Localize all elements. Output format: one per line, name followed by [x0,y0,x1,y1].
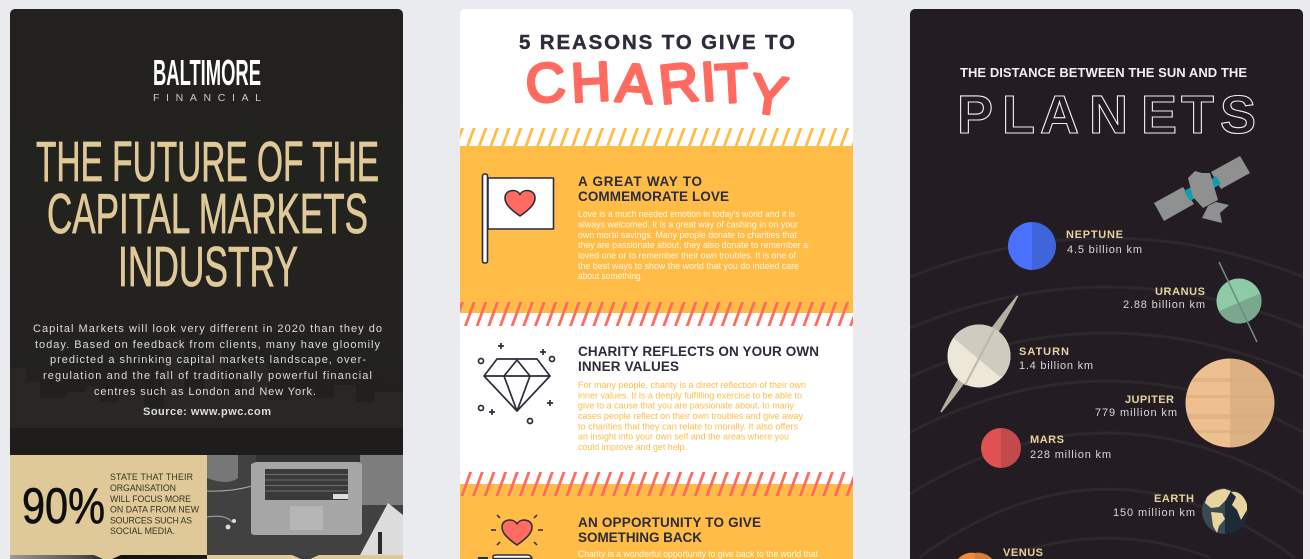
reason 2 text: could improve and get help. [578,442,687,452]
icon: heart over open hand [478,515,543,559]
reason 1 text [578,174,809,281]
reason 1 text: Love is a much needed emotion in today's world and it is [578,209,795,219]
reason 2 text [578,344,819,452]
label: Mars: 228 million km [1030,449,1111,461]
label: Neptune: 4.5 billion km [1067,244,1142,256]
label: Neptune: NEPTUNE [1066,229,1123,241]
label: Mars: MARS [1030,434,1064,446]
label: Jupiter: 779 million km [1095,407,1177,419]
reason 1 text: own moral savings. Many people donate to charities that [578,230,797,240]
title: INDUSTRY [118,235,298,299]
charity title: CHARITY [524,50,791,128]
planet: Neptune [1008,222,1056,270]
reason 1 text: the best ways to show the world that you do indeed care [578,261,799,271]
reason 2 text: CHARITY REFLECTS ON YOUR OWN [578,344,819,359]
intro text: Capital Markets will look very different in 2020 than they do [33,323,382,335]
icon: satellite [1154,156,1250,223]
label: Neptune [1066,230,1142,253]
icon: flag with heart [482,174,554,263]
title: CAPITAL MARKETS [47,182,368,246]
intro text: predicted a shrinking capital markets landscape, over- [50,354,366,366]
stat panel: 90% [10,455,207,555]
label: Venus: VENUS [1003,547,1043,559]
planet: Uranus [1216,262,1262,342]
label: Jupiter [1096,396,1176,416]
reason 3 text: Charity is a wonderful opportunity to give back to the world that [578,549,818,559]
intro text: centres such as London and New York. [94,386,316,398]
lower photo tile [10,555,138,559]
title: THE FUTURE OF THE [36,130,379,194]
planet: Mars [981,428,1021,468]
reason 2 text: give to a cause that you are passionate about. In many [578,401,794,411]
planet: Jupiter [1185,358,1275,448]
reason 2 text: inner values. It is a deeply fulfilling exercise to be able to [578,390,802,400]
label: Earth: 150 million km [1113,507,1195,519]
photo: laptop on desk [207,455,403,555]
logo [154,60,261,101]
intro text: today. Based on feedback from clients, many have gloomily [35,339,380,351]
label: Earth [1114,494,1194,516]
reason 3 text: AN OPPORTUNITY TO GIVE [578,515,761,530]
reason 1 text: they are passionate about, they also donate to remember a [578,240,809,250]
orange section backgrounds and stripes [460,128,853,559]
label: Jupiter: JUPITER [1125,394,1174,406]
stat panel: 90%: SOURCES SUCH AS [110,516,192,526]
intro text [33,323,382,418]
reason 3 text [578,515,818,559]
reason 2 text: For many people, charity is a direct reflection of their own [578,380,806,390]
planet: Earth [1202,488,1248,534]
logo: FINANCIAL [153,92,261,104]
label: Saturn: SATURN [1019,346,1069,358]
skyline backdrop [10,423,402,428]
stat panel: 90%: 90% [22,478,105,534]
label: Saturn [1019,348,1092,369]
label: Uranus: URANUS [1155,286,1205,298]
stat panel: 90%: ORGANISATION [110,483,176,493]
planet: Venus [958,553,992,559]
orbit rings [905,238,1309,558]
reason 1 text: always welcomed. It is a great way of cashing in on your [578,220,798,230]
reason 2 text: to charities that they can relate to morally. It also offers [578,421,798,431]
heading: 5 REASONS TO GIVE TO [519,31,795,54]
heading: THE DISTANCE BETWEEN THE SUN AND THE [960,65,1247,80]
reason 1 text: COMMEMORATE LOVE [578,189,729,204]
planet: Saturn [941,296,1018,412]
logo: BALTIMORE [153,52,261,93]
planets outlined title: PLANETS [957,85,1256,145]
panel: planets infographic [905,9,1309,559]
label: Saturn: 1.4 billion km [1019,360,1093,372]
lower tan tile [207,555,403,559]
intro text: Source: www.pwc.com [143,406,271,418]
title [36,141,378,287]
stat panel: 90%: STATE THAT THEIR [110,472,193,482]
panel: capital markets infographic [10,9,403,559]
reason 2 text: an insight into your own self and the areas where you [578,432,789,442]
panel: charity infographic [460,9,853,559]
label: Mars [1030,436,1110,458]
label: Uranus: 2.88 billion km [1123,299,1205,311]
stat panel: 90%: SOCIAL MEDIA. [110,526,175,536]
reason 1 text: loved one or to remember their own troubles. It is one of [578,250,796,260]
icon: diamond with sparkles [478,343,554,424]
label: Uranus [1124,288,1204,308]
stat panel: 90%: WILL FOCUS MORE [110,494,191,504]
reason 1 text: A GREAT WAY TO [578,174,702,189]
label: Earth: EARTH [1154,493,1194,505]
reason 1 text: about something. [578,271,643,281]
intro text: regulation and the fall of traditionally powerful financial [43,370,372,382]
reason 2 text: INNER VALUES [578,359,679,374]
reason 2 text: cases people reflect on their own troubles and give away [578,411,803,421]
reason 3 text: SOMETHING BACK [578,530,702,545]
stat panel: 90%: ON DATA FROM NEW [110,504,200,514]
